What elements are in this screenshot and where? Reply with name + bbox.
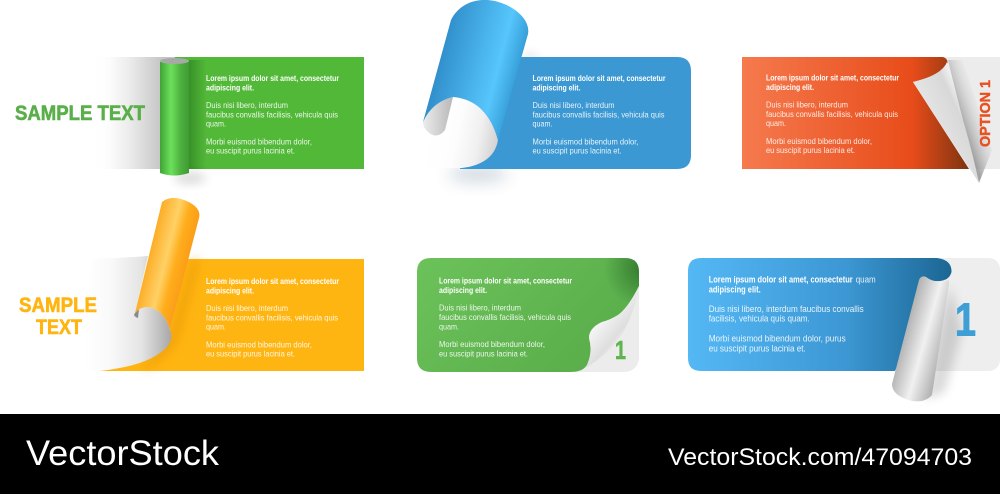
text block: eu suscipit purus lacinia et. xyxy=(439,348,528,358)
text block: Lorem ipsum dolor sit amet, consectetur xyxy=(532,73,666,83)
text block: faucibus convallis facilisis, vehicula quis xyxy=(766,109,898,119)
text block: eu suscipit purus lacinia et. xyxy=(709,343,806,353)
text block: quam. xyxy=(206,119,226,129)
heading: sample text xyxy=(19,294,97,339)
text block: Duis nisi libero, interdum xyxy=(206,303,288,313)
heading: sample text: SAMPLE TEXT xyxy=(15,102,145,125)
text block: Lorem ipsum dolor sit amet, consectetur xyxy=(206,73,340,83)
text block: faucibus convallis facilisis, vehicula quis xyxy=(532,109,664,119)
text block: Lorem ipsum dolor sit amet, consectetur xyxy=(766,72,900,82)
roll shadow xyxy=(925,285,962,400)
text block: Duis nisi libero, interdum xyxy=(766,99,848,109)
text block: quam. xyxy=(206,322,226,332)
text block: Lorem ipsum dolor sit amet, consectetur xyxy=(206,276,340,286)
text block: quam xyxy=(856,275,876,285)
text block: adipiscing elit. xyxy=(206,82,254,92)
blue panel xyxy=(460,57,691,169)
text block: Lorem ipsum dolor sit amet, consectetur xyxy=(439,276,573,286)
corner curl xyxy=(913,62,979,183)
icon: blue roll xyxy=(423,0,528,140)
text block: adipiscing elit. xyxy=(532,82,580,92)
panel: blue banner with large roll xyxy=(423,0,691,182)
text block: Duis nisi libero, interdum xyxy=(439,303,521,313)
roll shadow xyxy=(448,166,508,182)
text block: adipiscing elit. xyxy=(439,285,487,295)
gray backing xyxy=(920,258,1000,371)
number 1: 1 xyxy=(955,294,976,346)
text block: quam. xyxy=(532,119,552,129)
inner white page xyxy=(423,97,498,168)
text block: Morbi euismod bibendum dolor, xyxy=(206,136,312,146)
text block: adipiscing elit. xyxy=(206,285,254,295)
curl shadow xyxy=(948,60,992,183)
yellow panel xyxy=(100,259,364,371)
icon: green roll xyxy=(160,58,189,176)
text block: Morbi euismod bibendum dolor, xyxy=(439,339,545,349)
text block: eu suscipit purus lacinia et. xyxy=(532,146,622,156)
gray backing xyxy=(935,57,1000,169)
orange panel xyxy=(742,57,969,169)
panel: blue rounded card with diagonal roll xyxy=(688,258,1000,401)
text block xyxy=(206,73,340,156)
icon: yellow roll xyxy=(135,198,199,330)
heading: sample text: SAMPLE xyxy=(19,294,97,317)
text block: facilisis, vehicula quis quam. xyxy=(709,314,810,324)
green panel xyxy=(175,57,364,169)
text block xyxy=(532,73,666,156)
panel: yellow banner with diagonal roll xyxy=(19,198,364,372)
text block xyxy=(206,276,340,359)
heading: sample text: TEXT xyxy=(36,316,82,339)
curl corner shading xyxy=(600,258,639,322)
curl xyxy=(582,286,639,370)
text block: Duis nisi libero, interdum xyxy=(532,100,614,110)
text block: Lorem ipsum dolor sit amet, consectetur xyxy=(709,275,853,285)
text block: Morbi euismod bibendum dolor, xyxy=(532,136,638,146)
logo text: VectorStock xyxy=(26,434,220,473)
text block: Duis nisi libero, interdum faucibus convallis xyxy=(709,304,864,314)
text block: quam. xyxy=(439,321,459,331)
text block: faucibus convallis facilisis, vehicula quis xyxy=(206,109,338,119)
text block: eu suscipit purus lacinia et. xyxy=(766,145,855,155)
label: option 1: OPTION 1 xyxy=(977,80,994,147)
icon: silver roll xyxy=(892,276,949,401)
peeled page backing xyxy=(95,57,175,169)
gray backing xyxy=(560,258,639,372)
peeled page xyxy=(80,256,171,372)
text block: Morbi euismod bibendum dolor, xyxy=(206,339,312,349)
text block: Morbi euismod bibendum dolor, xyxy=(766,136,872,146)
text block xyxy=(439,276,573,358)
roll shadow xyxy=(140,259,200,371)
roll shadow xyxy=(174,172,206,184)
footer bar xyxy=(0,414,1000,494)
green card xyxy=(417,258,639,372)
text block xyxy=(709,275,876,353)
panel: orange banner with corner curl xyxy=(742,57,1000,183)
panel: green banner with vertical roll xyxy=(15,57,364,184)
text block: eu suscipit purus lacinia et. xyxy=(206,349,295,359)
stock url: VectorStock.com/47094703 xyxy=(668,444,972,471)
number 1: 1 xyxy=(615,335,626,365)
text block xyxy=(766,72,900,155)
text block: adipiscing elit. xyxy=(766,82,814,92)
text block: Morbi euismod bibendum dolor, purus xyxy=(709,333,846,343)
text block: adipiscing elit. xyxy=(709,285,761,295)
text block: eu suscipit purus lacinia et. xyxy=(206,146,295,156)
inner gray strip xyxy=(423,97,453,136)
text block: faucibus convallis facilisis, vehicula quis xyxy=(206,312,338,322)
page notch xyxy=(134,309,139,318)
text block: quam. xyxy=(766,118,786,128)
text block: Duis nisi libero, interdum xyxy=(206,100,288,110)
panel: green rounded card with corner curl xyxy=(417,258,639,372)
text block: faucibus convallis facilisis, vehicula quis xyxy=(439,312,571,322)
blue card xyxy=(688,258,952,371)
